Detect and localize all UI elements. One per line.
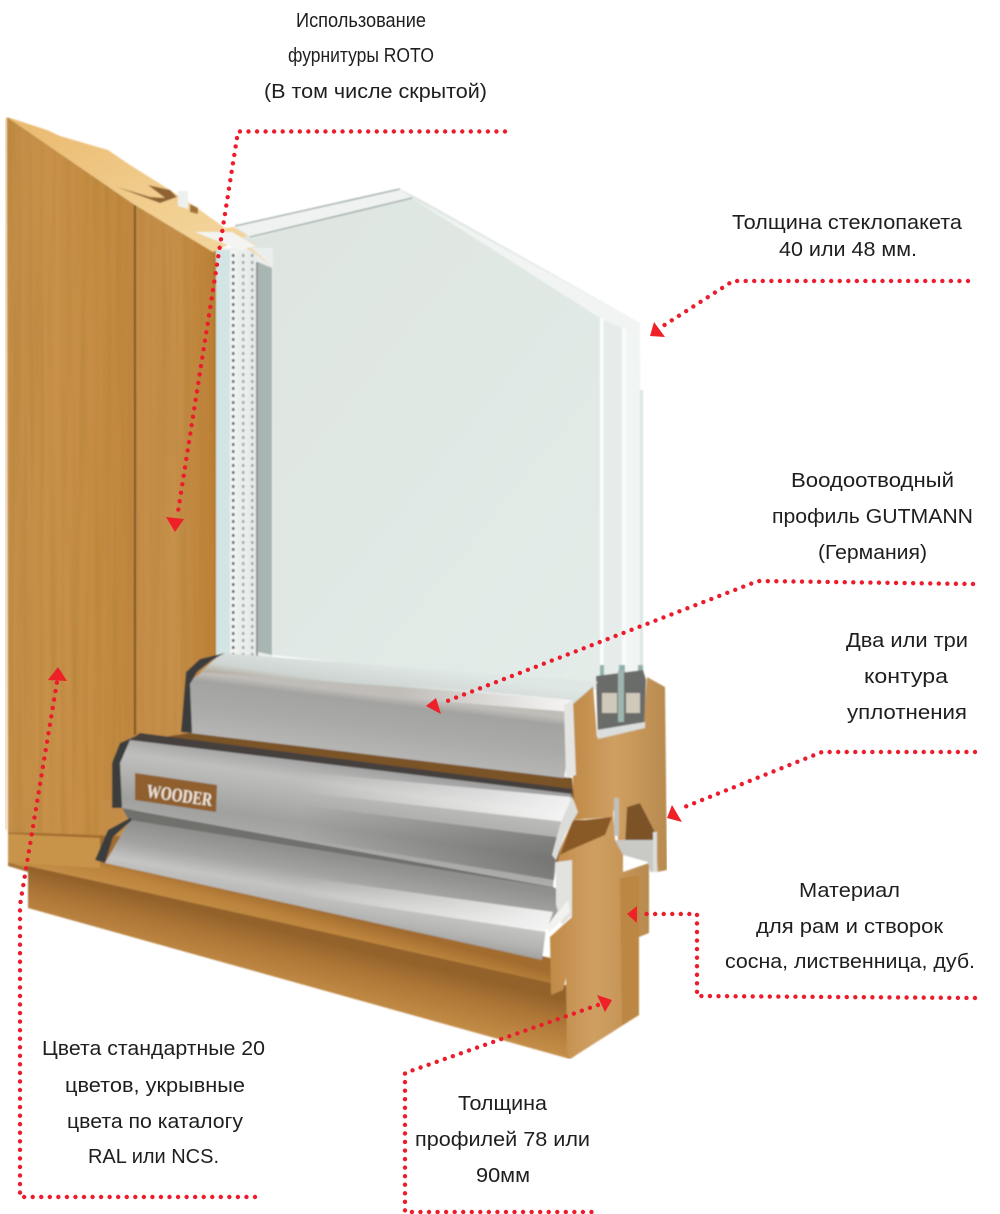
label — [415, 1093, 590, 1187]
label: цветов, укрывные — [65, 1075, 245, 1097]
label: Воодоотводный — [791, 470, 954, 492]
arrow — [597, 995, 612, 1012]
aluminium rail: lower — [95, 818, 572, 960]
label: (Германия) — [818, 542, 927, 564]
label — [846, 630, 968, 724]
glazing spacers — [596, 670, 646, 739]
arrow — [166, 517, 184, 532]
label — [42, 1038, 265, 1168]
dotted leader — [177, 132, 505, 518]
arrow — [650, 322, 665, 337]
label: Цвета стандартные 20 — [42, 1038, 265, 1060]
dotted leader — [20, 682, 255, 1197]
callout: glass unit thickness — [650, 212, 968, 337]
label: уплотнения — [847, 702, 967, 724]
arrow — [426, 698, 441, 714]
label: цвета по каталогу — [67, 1111, 243, 1133]
label: профиль GUTMANN — [772, 506, 973, 528]
aluminium rail: upper — [130, 653, 598, 800]
arrow — [48, 667, 67, 681]
arrow — [667, 805, 682, 822]
label — [772, 470, 973, 564]
label: 40 или 48 мм. — [779, 239, 917, 261]
dotted leader — [663, 281, 968, 326]
label: фурнитуры ROTO — [288, 45, 434, 67]
top cut of the frame — [7, 117, 273, 267]
logo badge: WOODER — [145, 781, 214, 811]
callout: colours — [20, 667, 265, 1197]
dotted leader — [642, 914, 975, 998]
callout: sealing contours — [667, 630, 975, 822]
arrow — [627, 906, 637, 923]
wooden frame face — [5, 117, 216, 880]
dotted leader — [682, 752, 975, 808]
label: Толщина — [458, 1093, 548, 1115]
label: RAL или NCS. — [88, 1146, 219, 1168]
label — [732, 212, 963, 261]
label: сосна, лиственница, дуб. — [725, 951, 975, 973]
callout: GUTMANN profile — [426, 470, 973, 714]
label — [264, 10, 487, 103]
aluminium rail: middle — [112, 733, 578, 892]
label: (В том числе скрытой) — [264, 81, 487, 103]
label: Два или три — [846, 630, 968, 652]
window cross-section illustration — [5, 117, 667, 1059]
label — [725, 880, 975, 973]
label: профилей 78 или — [415, 1129, 590, 1151]
callout: ROTO hardware — [166, 10, 505, 532]
upper sash wood section — [560, 677, 667, 872]
logo badge — [135, 773, 217, 812]
label: контура — [864, 666, 949, 688]
callout: frame material — [627, 880, 975, 998]
spacer strip — [215, 248, 273, 660]
label: Использование — [296, 10, 426, 32]
dotted leader — [442, 581, 973, 703]
glass unit — [232, 189, 643, 690]
label: для рам и створок — [756, 916, 943, 938]
label: Толщина стеклопакета — [732, 212, 963, 234]
lower frame wood section — [550, 813, 649, 1059]
label: 90мм — [476, 1165, 530, 1187]
dotted leader — [405, 1005, 598, 1212]
callout: profile thickness — [405, 995, 612, 1212]
lower frame steps — [8, 832, 575, 1059]
label: Материал — [799, 880, 900, 902]
